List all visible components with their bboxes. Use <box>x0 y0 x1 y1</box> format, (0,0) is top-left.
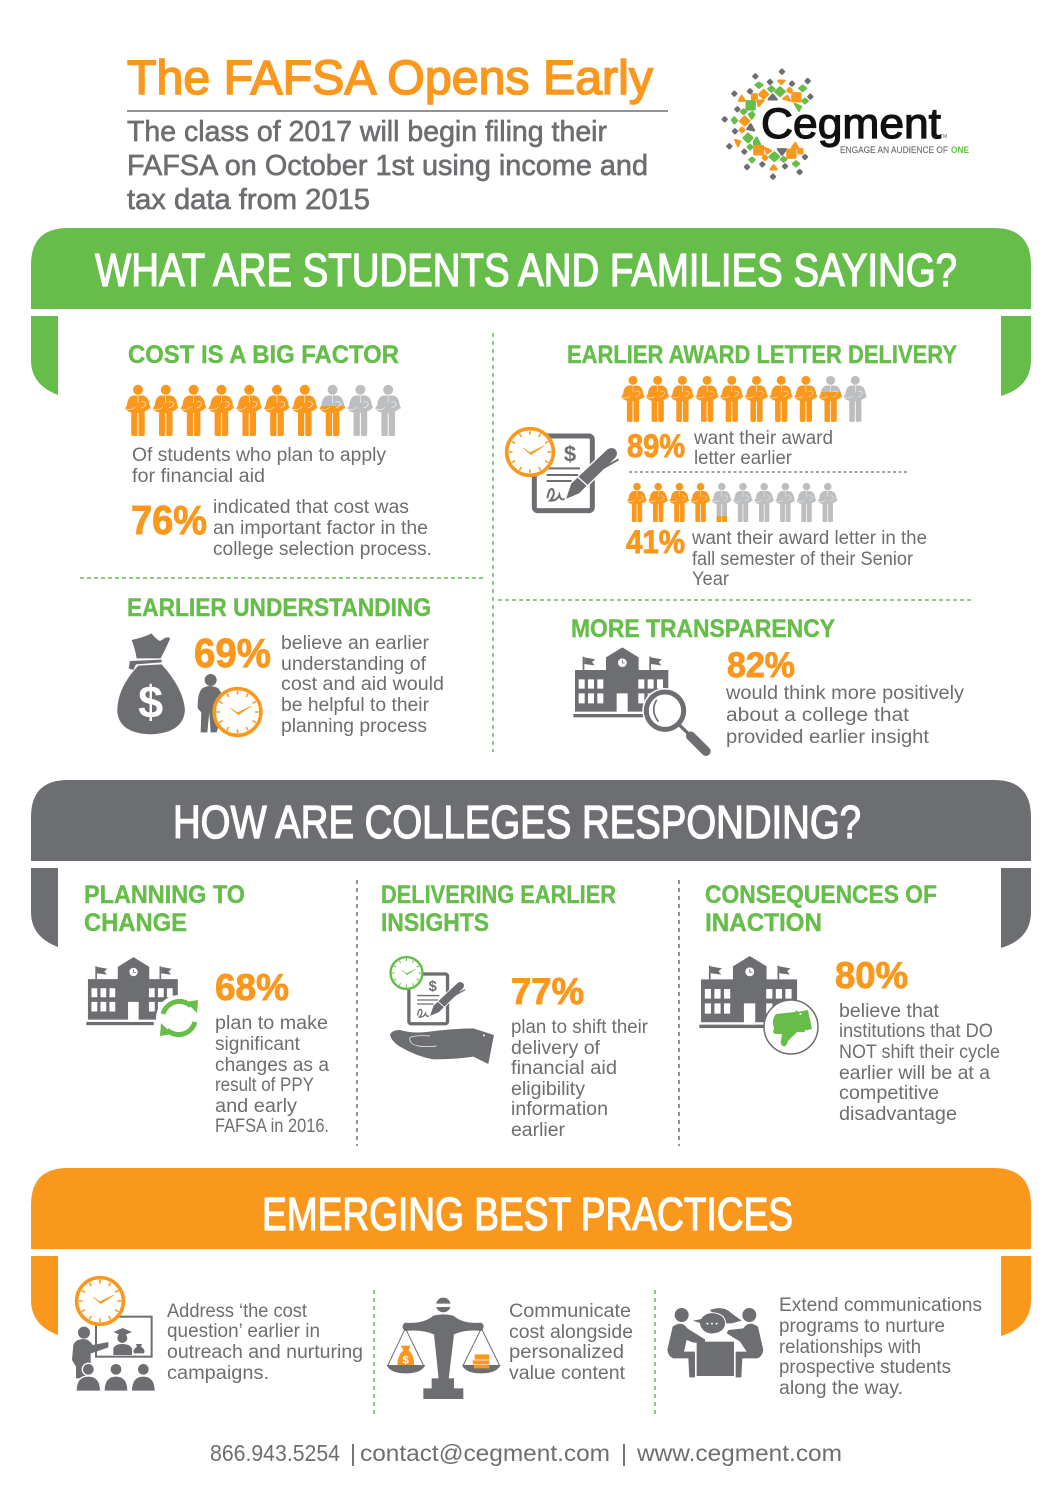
text: want award letter earlier: letter earlier <box>694 448 793 469</box>
icon: presenter with clock and audience <box>72 1278 155 1391</box>
footer: contact details: contact@cegment.com <box>360 1440 610 1466</box>
text: extend communications <box>779 1295 982 1399</box>
text: want award letter earlier <box>693 428 833 469</box>
stat: 80%: 80% <box>835 955 908 996</box>
text: consequences: institutions that DO <box>839 1021 993 1042</box>
text: extend communications: Extend communications <box>779 1295 982 1316</box>
stat: 82%: 82% <box>727 646 795 685</box>
text: earlier understanding: cost and aid would <box>281 674 444 695</box>
footer: contact details: | <box>350 1440 356 1466</box>
text: communicate cost: personalized <box>509 1342 624 1363</box>
text: planning: FAFSA in 2016. <box>215 1116 329 1137</box>
icon: two people talking at a table <box>667 1308 763 1377</box>
text: planning: plan to make <box>215 1013 328 1034</box>
text: cost factor: indicated that cost was <box>213 497 409 518</box>
text: planning: changes as a <box>215 1055 329 1076</box>
footer: contact details: www.cegment.com <box>636 1440 842 1466</box>
icon: person with clock <box>198 674 261 735</box>
text: consequences: competitive <box>839 1083 939 1104</box>
stat: 77%: 77% <box>511 971 584 1012</box>
panel: cost is a big factor <box>125 341 432 560</box>
logo: Cegment <box>723 70 969 179</box>
text: planning: result of PPY <box>215 1075 314 1096</box>
text: address the cost question: question’ earlier in <box>167 1321 320 1342</box>
text: students who plan to apply: Of students who plan to apply <box>132 445 387 466</box>
panel: delivering earlier insights: INSIGHTS <box>381 909 489 937</box>
stat: 69%: 69% <box>194 630 271 676</box>
panel: delivering earlier insights <box>381 881 649 1141</box>
icon: school with thumbs down <box>699 956 818 1054</box>
text: consequences: NOT shift their cycle <box>839 1042 1000 1063</box>
logo: Cegment: Cegment <box>761 100 941 148</box>
text: delivering: eligibility <box>511 1079 586 1100</box>
panel: earlier understanding <box>117 594 444 737</box>
logo: Cegment: ENGAGE AN AUDIENCE OF <box>840 145 948 155</box>
icon: money bag <box>117 633 185 734</box>
text: consequences <box>839 1001 1000 1125</box>
text: delivering <box>511 1017 649 1141</box>
logo: Cegment: TM <box>940 134 947 140</box>
icon: money bag: $ <box>138 677 163 728</box>
text: communicate cost: value content <box>509 1363 626 1384</box>
text: delivering: financial aid <box>511 1058 617 1079</box>
text: earlier understanding: be helpful to their <box>281 695 430 716</box>
panel: delivering earlier insights: DELIVERING EARLIER <box>381 881 616 909</box>
text: earlier understanding <box>281 633 444 737</box>
text: students who plan to apply: for financial aid <box>132 466 265 487</box>
section banner: colleges responding <box>31 780 1031 948</box>
text: extend communications: along the way. <box>779 1378 903 1399</box>
text: earlier understanding: believe an earlier <box>281 633 430 654</box>
title: The FAFSA Opens Early <box>127 52 653 105</box>
text: transparency <box>725 683 965 748</box>
panel: planning to change: CHANGE <box>84 909 187 937</box>
subtitle: FAFSA on October 1st using income and <box>127 150 648 182</box>
text: extend communications: prospective students <box>779 1357 951 1378</box>
text: communicate cost: Communicate <box>509 1301 631 1322</box>
text: delivering: plan to shift their <box>511 1017 649 1038</box>
section banner: students and families <box>31 228 1031 396</box>
stat: 76%: 76% <box>131 497 207 543</box>
text: earlier understanding: understanding of <box>281 654 427 675</box>
icon: school with magnifier <box>573 647 706 751</box>
icon: balance scales: $ <box>403 1355 410 1367</box>
footer: contact details: | <box>621 1440 627 1466</box>
footer: contact details <box>210 1440 842 1466</box>
text: planning: and early <box>215 1096 298 1117</box>
text: transparency: would think more positively <box>725 683 965 704</box>
stat: 89%: 89% <box>627 428 685 464</box>
text: consequences: believe that <box>839 1001 940 1022</box>
text: planning: significant <box>215 1034 301 1055</box>
text: students who plan to apply <box>132 445 387 487</box>
icon: balance scales <box>387 1298 501 1399</box>
section banner: best practices: EMERGING BEST PRACTICES <box>262 1188 793 1240</box>
text: earlier understanding: planning process <box>281 716 427 737</box>
text: want award letter earlier: want their award <box>693 428 833 449</box>
panel: consequences of inaction: INACTION <box>705 909 822 937</box>
icon: document with pen and clock <box>507 429 619 511</box>
section banner: best practices <box>31 1168 1031 1336</box>
subtitle: tax data from 2015 <box>127 184 370 216</box>
panel: more transparency: MORE TRANSPARENCY <box>571 615 835 643</box>
icon: document on hand with clock <box>390 957 494 1064</box>
footer: contact details: 866.943.5254 <box>210 1440 340 1466</box>
panel: earlier award letter delivery: EARLIER AWARD LETTER DELIVERY <box>567 341 957 369</box>
icon: school with refresh arrows <box>86 957 202 1041</box>
text: address the cost question: outreach and nurturing <box>167 1342 363 1363</box>
pictogram: 76 percent of people <box>125 385 401 436</box>
panel: planning to change: PLANNING TO <box>84 881 245 909</box>
panel: earlier award letter delivery <box>507 341 957 590</box>
text: extend communications: programs to nurture <box>779 1316 945 1337</box>
subtitle: The class of 2017 will begin filing their <box>127 116 607 148</box>
panel: consequences of inaction <box>699 881 1000 1125</box>
panel: planning to change <box>84 881 329 1137</box>
text: fall semester: fall semester of their Senior <box>692 549 914 570</box>
text: delivering: earlier <box>511 1120 566 1141</box>
text: cost factor: an important factor in the <box>213 518 428 539</box>
text: delivering: delivery of <box>511 1038 601 1059</box>
text: transparency: about a college that <box>726 705 910 726</box>
pictogram: 41 percent of people <box>627 483 838 522</box>
text: communicate cost: cost alongside <box>509 1322 633 1343</box>
text: address the cost question: campaigns. <box>167 1363 269 1384</box>
text: address the cost question: Address ‘the cost <box>167 1301 308 1322</box>
text: fall semester: want their award letter in the <box>691 528 927 549</box>
text: cost factor <box>213 497 432 560</box>
text: address the cost question <box>167 1301 363 1384</box>
panel: earlier understanding: EARLIER UNDERSTANDING <box>127 594 431 622</box>
section banner: colleges responding: HOW ARE COLLEGES RESPONDING? <box>173 796 861 848</box>
text: consequences: disadvantage <box>839 1104 957 1125</box>
logo: Cegment: ONE <box>951 145 969 155</box>
text: cost factor: college selection process. <box>213 539 432 560</box>
text: communicate cost <box>509 1301 633 1384</box>
text: transparency: provided earlier insight <box>726 727 930 748</box>
text: delivering: information <box>511 1099 608 1120</box>
text: extend communications: relationships with <box>779 1337 921 1358</box>
text: planning <box>215 1013 329 1137</box>
stat: 68%: 68% <box>215 967 289 1008</box>
pictogram: 89 percent of people <box>621 376 867 422</box>
text: fall semester <box>691 528 927 590</box>
panel: extend communications <box>667 1295 982 1399</box>
panel: communicate cost <box>387 1298 633 1399</box>
panel: address the cost question <box>72 1278 363 1391</box>
subtitle <box>127 116 648 216</box>
panel: cost is a big factor: COST IS A BIG FACTOR <box>128 341 399 369</box>
text: fall semester: Year <box>692 569 730 590</box>
stat: 41%: 41% <box>626 524 685 560</box>
panel: consequences of inaction: CONSEQUENCES OF <box>705 881 937 909</box>
text: consequences: earlier will be at a <box>839 1063 990 1084</box>
panel: more transparency <box>571 615 965 751</box>
